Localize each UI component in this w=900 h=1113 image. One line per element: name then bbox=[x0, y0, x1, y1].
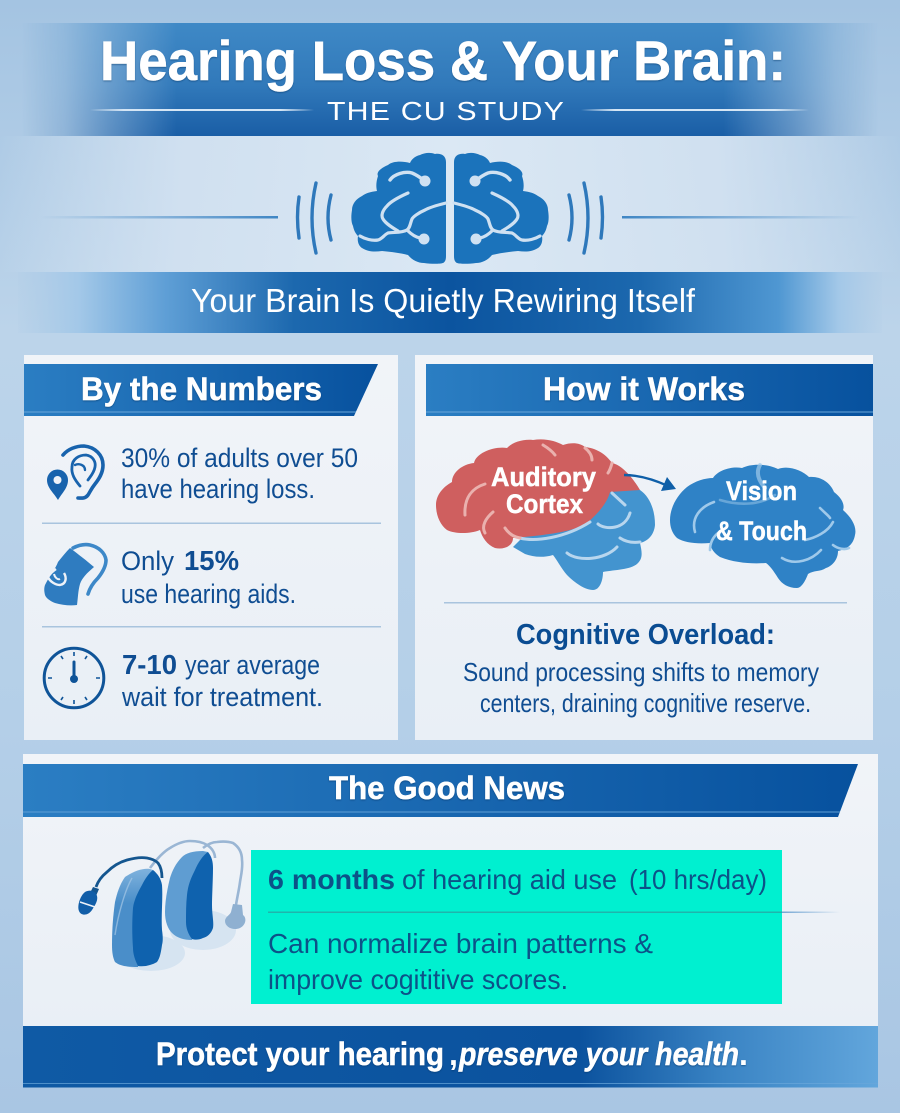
callout: six months: improve cogititive scores. bbox=[268, 964, 568, 995]
stat: 30 percent: 30% of adults over 50 bbox=[121, 443, 358, 473]
stat: 15 percent: 15% bbox=[184, 545, 239, 576]
stat: 15 percent: Only bbox=[121, 546, 174, 576]
heading: by the numbers: By the Numbers bbox=[81, 371, 322, 407]
icon: hearing aid bbox=[44, 545, 106, 605]
illustration: vision and touch brain bbox=[670, 465, 855, 588]
text: cognitive overload: centers, draining cognitive reserve. bbox=[480, 688, 811, 718]
heading: the good news: The Good News bbox=[329, 770, 565, 806]
callout: six months bbox=[251, 850, 840, 1004]
label: vision and touch: Vision bbox=[726, 476, 797, 506]
icon: clock bbox=[44, 648, 104, 708]
tagline band bbox=[18, 272, 882, 333]
callout: six months: (10 hrs/day) bbox=[629, 864, 767, 895]
stat: 30 percent: have hearing loss. bbox=[121, 474, 315, 504]
text: cognitive overload: Sound processing shifts to memory bbox=[463, 657, 819, 687]
illustration: auditory cortex brain bbox=[436, 439, 655, 590]
label: auditory cortex bbox=[491, 462, 596, 519]
stat: 30 percent bbox=[121, 443, 358, 504]
arrow: auditory to vision bbox=[624, 475, 676, 491]
label: vision and touch bbox=[716, 476, 807, 546]
tagline band: Your Brain Is Quietly Rewiring Itself bbox=[191, 282, 696, 319]
stat: 7-10 years bbox=[121, 649, 323, 712]
stat: 7-10 years: year average bbox=[185, 650, 320, 680]
callout: six months: of hearing aid use bbox=[402, 864, 617, 895]
stat: 15 percent bbox=[121, 545, 296, 609]
heading: the good news bbox=[23, 764, 858, 817]
callout: six months: Can normalize brain patterns & bbox=[268, 928, 653, 959]
heading: how it works: How it Works bbox=[543, 371, 745, 407]
footer banner: . bbox=[739, 1036, 748, 1072]
stat: 15 percent: use hearing aids. bbox=[121, 579, 296, 609]
text: cognitive overload bbox=[463, 619, 819, 718]
label: auditory cortex: Auditory bbox=[491, 462, 596, 492]
icon: brain with sound waves bbox=[40, 153, 860, 264]
panel: the good news bbox=[23, 754, 878, 1026]
header banner bbox=[22, 23, 878, 136]
footer banner: preserve your health bbox=[458, 1036, 739, 1072]
stat: 7-10 years: wait for treatment. bbox=[121, 682, 323, 712]
panel: by the numbers bbox=[24, 355, 398, 740]
heading: by the numbers bbox=[24, 364, 378, 416]
stat: 7-10 years: 7-10 bbox=[122, 649, 177, 680]
label: auditory cortex: Cortex bbox=[506, 489, 583, 519]
heading: how it works bbox=[426, 364, 873, 416]
icon: hearing aids bbox=[78, 841, 245, 971]
title: Hearing Loss & Your Brain: bbox=[100, 29, 786, 92]
footer banner bbox=[23, 1026, 878, 1088]
footer banner: Protect your hearing bbox=[156, 1036, 444, 1072]
panel: how it works bbox=[415, 355, 873, 740]
icon: ear with pin bbox=[47, 446, 103, 500]
callout: six months: 6 months bbox=[268, 864, 395, 895]
text: cognitive overload: Cognitive Overload: bbox=[516, 619, 775, 651]
label: vision and touch: & Touch bbox=[716, 516, 807, 546]
subtitle: THE CU STUDY bbox=[327, 96, 565, 126]
footer banner: , bbox=[449, 1036, 458, 1072]
